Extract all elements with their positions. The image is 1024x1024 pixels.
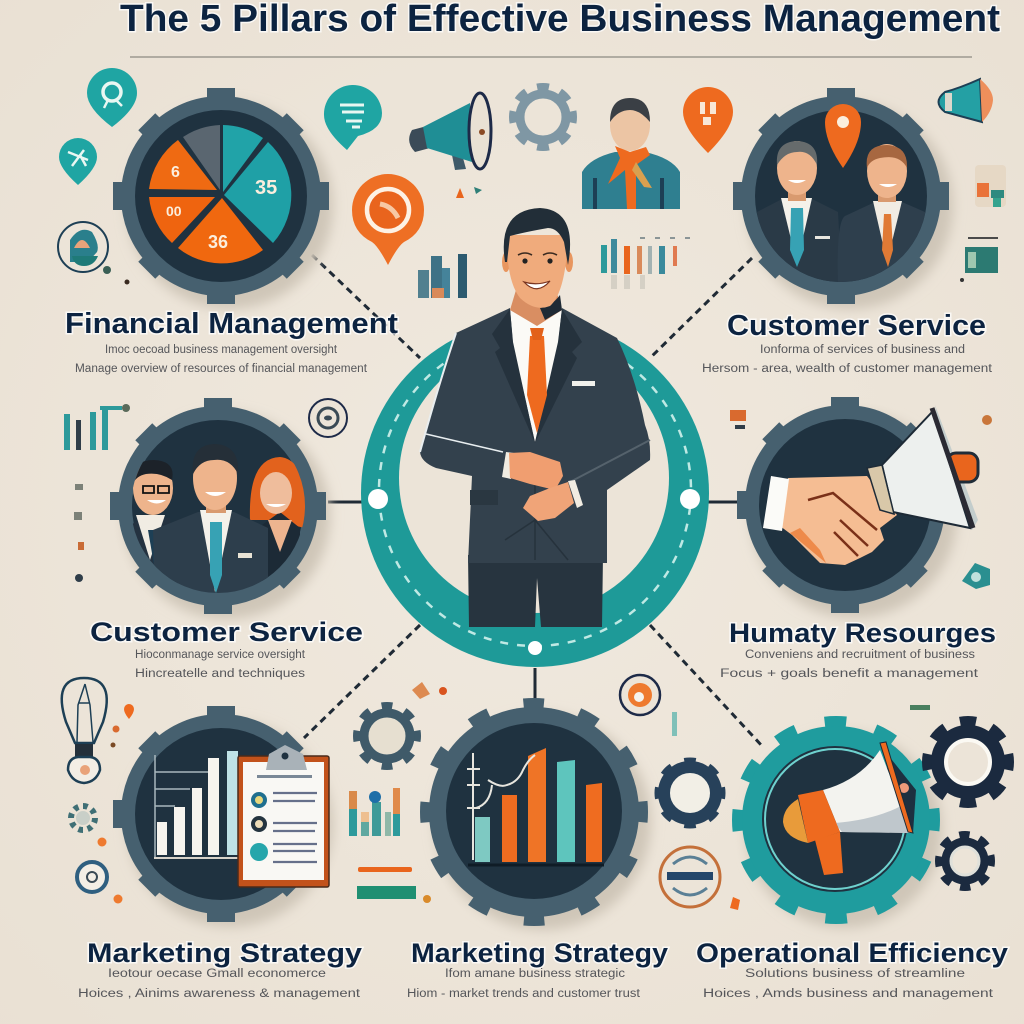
- large cogs bottom right: [730, 705, 1009, 910]
- text: customer service top right: [702, 310, 993, 375]
- icon: teal pin 1: [87, 68, 137, 127]
- icon: teal pin 2: [59, 138, 97, 185]
- text: customer service left: Hioconmanage service oversight: [135, 649, 306, 661]
- connector lines: [304, 255, 763, 747]
- icon: circular badge left: [58, 222, 130, 284]
- jacket: [420, 308, 650, 563]
- text: customer service top right: Ionforma of services of business and: [760, 344, 965, 356]
- smile: [524, 281, 550, 289]
- text: customer service left: Customer Service: [90, 617, 363, 647]
- panel: operational efficiency gear: [738, 722, 942, 928]
- text: financial management: Financial Management: [65, 308, 398, 340]
- badge centre: [412, 675, 677, 903]
- cog right of centre gear: [659, 762, 721, 824]
- text: financial management: Manage overview of resources of financial management: [75, 363, 368, 375]
- mini chart right: [960, 165, 1006, 282]
- pie chart: [149, 125, 291, 263]
- text: financial management: Imoc oecoad business management oversight: [105, 344, 338, 356]
- icon: orange pin top: [683, 87, 733, 153]
- text: customer service top right: Customer Service: [727, 310, 986, 342]
- pocket: [572, 381, 595, 386]
- clipboard checklist: [238, 745, 329, 887]
- panel: human resources gear with handshake: [737, 397, 978, 618]
- panel: marketing strategy gear with bars: [113, 706, 333, 927]
- icon: target badge: [309, 399, 347, 437]
- icon: teal megaphone top right: [938, 79, 993, 122]
- text: operational efficiency: [696, 938, 1008, 1000]
- text: human resources: Conveniens and recruitment of business: [745, 649, 975, 661]
- scattered marks left mid: [74, 484, 84, 582]
- icon: light bulb: [62, 678, 107, 783]
- megaphone: [783, 742, 916, 875]
- woman: [250, 457, 306, 590]
- lapels: [492, 309, 582, 443]
- hands: [509, 452, 563, 490]
- text: operational efficiency: Operational Efficiency: [696, 938, 1008, 968]
- panel: marketing strategy gear bottom centre: [425, 703, 651, 930]
- cog centre left: [357, 706, 417, 766]
- central businessman: [420, 208, 650, 627]
- panel: financial management gear: [113, 88, 333, 309]
- hair: [504, 208, 570, 265]
- panel: customer service gear top right: [733, 88, 953, 309]
- legs: [468, 555, 603, 627]
- text: customer service top right: Hersom - area, wealth of customer management: [702, 363, 993, 375]
- text: marketing strategy centre: Hiom - market trends and customer trust: [407, 988, 641, 1000]
- megaphone: [867, 405, 978, 530]
- text: marketing strategy centre: Marketing Strategy: [411, 938, 668, 968]
- text: customer service left: Hincreatelle and techniques: [135, 668, 305, 680]
- bar chart: [154, 751, 240, 859]
- small marks near pin: [456, 187, 482, 198]
- cuffs: [502, 452, 583, 508]
- icon: grey cog top: [514, 88, 572, 146]
- text: marketing strategy left: [78, 938, 362, 1000]
- left man: [133, 460, 178, 584]
- shirt and collar: [510, 308, 562, 442]
- text: human resources: [720, 618, 996, 680]
- text: human resources: Humaty Resourges: [729, 618, 996, 648]
- text: marketing strategy left: Ieotour oecase Gmall economerce: [108, 968, 326, 980]
- text: marketing strategy left: Marketing Strategy: [87, 938, 362, 968]
- pie chart: 35: [255, 177, 277, 199]
- text: operational efficiency: Solutions business of streamline: [745, 968, 965, 980]
- mini chart top centre: [418, 254, 467, 298]
- person right: [838, 144, 925, 285]
- pie chart: 6: [171, 164, 180, 181]
- centre man: [153, 444, 268, 600]
- pie chart: 36: [208, 232, 228, 252]
- text: customer service left: [90, 617, 363, 680]
- badge under cog: [660, 847, 720, 907]
- text: marketing strategy left: Hoices , Ainims awareness & management: [78, 988, 361, 1000]
- icon: orange pin centre: [352, 174, 424, 265]
- icon: orange pin: [825, 104, 861, 168]
- mini chart upper right of man: [601, 238, 700, 289]
- text: marketing strategy centre: Ifom amane business strategic: [445, 968, 625, 980]
- small person icon top: [582, 98, 680, 209]
- text: operational efficiency: Hoices , Amds business and management: [703, 988, 994, 1000]
- icon: teal pin centre: [324, 85, 382, 150]
- text: marketing strategy centre: [407, 938, 668, 1000]
- person left: [757, 141, 842, 285]
- mini bar chart left: [64, 404, 130, 450]
- center ring: [361, 319, 709, 667]
- panel: customer service gear left: [110, 398, 330, 619]
- small left icons bottom: [71, 704, 134, 904]
- head: [507, 235, 568, 308]
- bar chart: [467, 748, 604, 865]
- icon: teal megaphone top: [409, 93, 491, 170]
- mini chart centre bottom: [349, 788, 416, 899]
- neck: [510, 290, 562, 326]
- tie: [527, 336, 547, 433]
- handshake: [763, 476, 897, 565]
- text: financial management: [65, 308, 398, 375]
- pie chart: 00: [166, 203, 182, 219]
- ears: [502, 252, 510, 272]
- text: human resources: Focus + goals benefit a management: [720, 668, 979, 680]
- small icons right mid: [730, 410, 992, 589]
